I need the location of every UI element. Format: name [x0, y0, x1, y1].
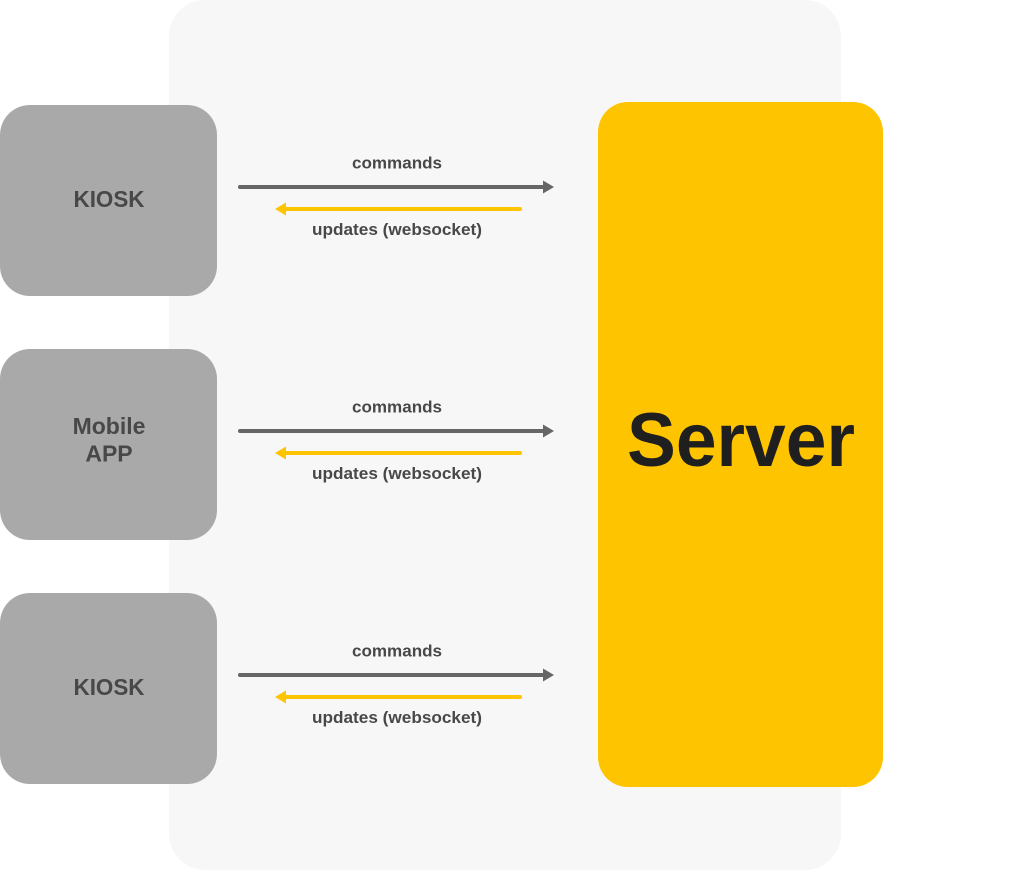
- label: Mobile APP: Mobile: [73, 413, 145, 439]
- arrows: row 1: updates (websocket): [312, 220, 482, 239]
- panel: kiosk top: [0, 105, 217, 296]
- arrows: row 2: updates (websocket): [312, 464, 482, 483]
- label: Mobile APP: APP: [85, 440, 133, 466]
- label: KIOSK: KIOSK: [74, 186, 145, 212]
- heading: Server: Server: [627, 398, 855, 483]
- arrows: row 2: commands: [352, 398, 442, 416]
- arrows: row 3: updates (websocket): [312, 708, 482, 727]
- label: KIOSK: KIOSK: [74, 674, 145, 700]
- arrows: row 1: commands: [352, 154, 442, 172]
- arrows: row 1: [240, 154, 554, 239]
- panel: server: [598, 102, 883, 787]
- arrows: row 2: [240, 398, 554, 483]
- arrows: row 3: [240, 642, 554, 727]
- arrows: row 3: commands: [352, 642, 442, 660]
- panel: mobile app: [0, 349, 217, 540]
- panel: background: [169, 0, 841, 870]
- panel: kiosk bottom: [0, 593, 217, 784]
